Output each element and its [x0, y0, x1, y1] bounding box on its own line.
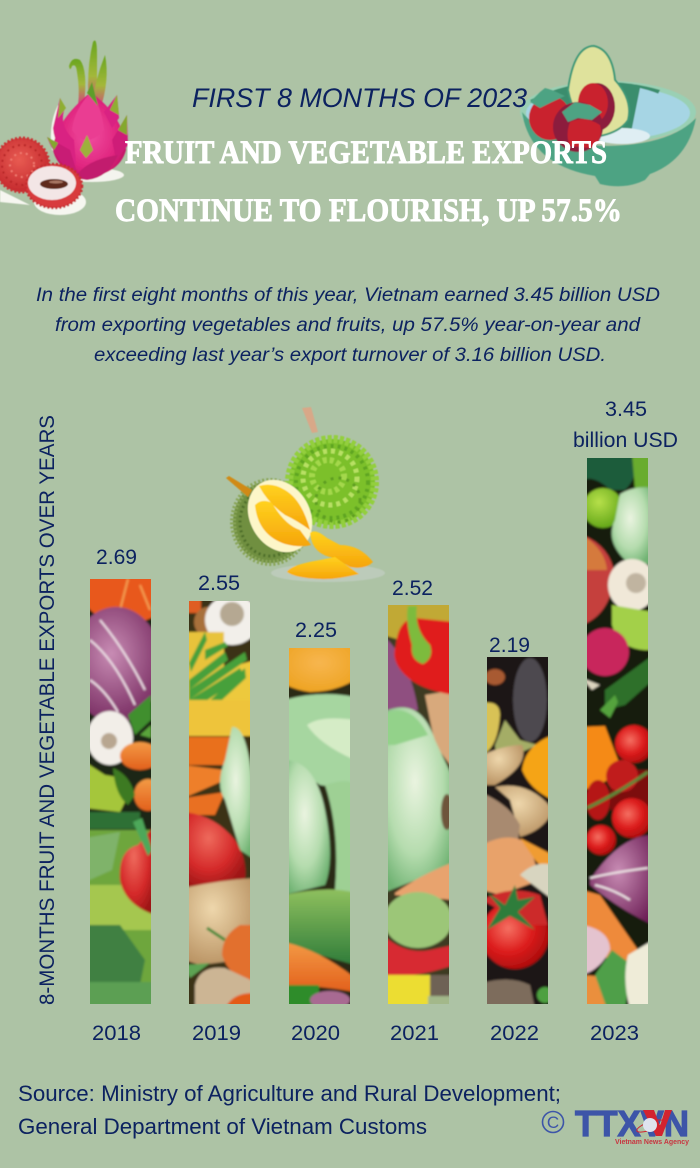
intro paragraph: exceeding last year’s export turnover of 3.16 billion USD.: [94, 345, 606, 366]
y-axis label: 8-MONTHS FRUIT AND VEGETABLE EXPORTS OVER YEARS: [36, 415, 59, 1005]
source note: Source: Ministry of Agriculture and Rural Development;: [18, 1081, 561, 1106]
year labels: 2022: [490, 1022, 539, 1045]
heading: [115, 83, 622, 229]
value labels: 2.19: [489, 634, 530, 657]
intro paragraph: from exporting vegetables and fruits, up 57.5% year-on-year and: [55, 315, 642, 336]
illustration: bowl with avocado and strawberries: [520, 46, 696, 186]
value labels: 2.52: [392, 577, 433, 600]
logo: TTXVN: TTXVN: [575, 1103, 689, 1144]
logo: TTXVN: C: [547, 1113, 559, 1132]
subtitle: FIRST 8 MONTHS OF 2023: [192, 83, 527, 113]
title line 1: FRUIT AND VEGETABLE EXPORTS: [125, 135, 607, 171]
bar 2023: [587, 458, 648, 1004]
source note: General Department of Vietnam Customs: [18, 1114, 427, 1139]
bar 2021: [388, 605, 449, 1004]
bar 2020: [289, 648, 350, 1004]
bar 2022: [487, 657, 548, 1004]
illustration: dragon fruit: [47, 41, 128, 182]
year labels: 2019: [192, 1022, 241, 1045]
value labels: [96, 398, 678, 657]
title line 2: CONTINUE TO FLOURISH, UP 57.5%: [115, 193, 622, 229]
bar chart: [70, 398, 678, 1045]
illustration: durian: [226, 407, 385, 582]
value labels: 2.69: [96, 546, 137, 569]
value labels: billion USD: [573, 429, 678, 452]
illustration: lychee: [0, 138, 86, 215]
intro paragraph: [36, 285, 660, 366]
year labels: 2023: [590, 1022, 639, 1045]
year labels: 2020: [291, 1022, 340, 1045]
year labels: 2021: [390, 1022, 439, 1045]
intro paragraph: In the first eight months of this year, Vietnam earned 3.45 billion USD: [36, 285, 660, 306]
value labels: 2.25: [295, 619, 337, 642]
bar 2018: [90, 579, 151, 1004]
bar 2019: [189, 601, 250, 1004]
year labels: 2018: [92, 1022, 141, 1045]
value labels: 2.55: [198, 572, 240, 595]
value labels: 3.45: [605, 398, 647, 421]
logo: TTXVN: Vietnam News Agency: [615, 1139, 689, 1146]
source note: [18, 1081, 561, 1139]
year labels: [92, 1022, 639, 1045]
